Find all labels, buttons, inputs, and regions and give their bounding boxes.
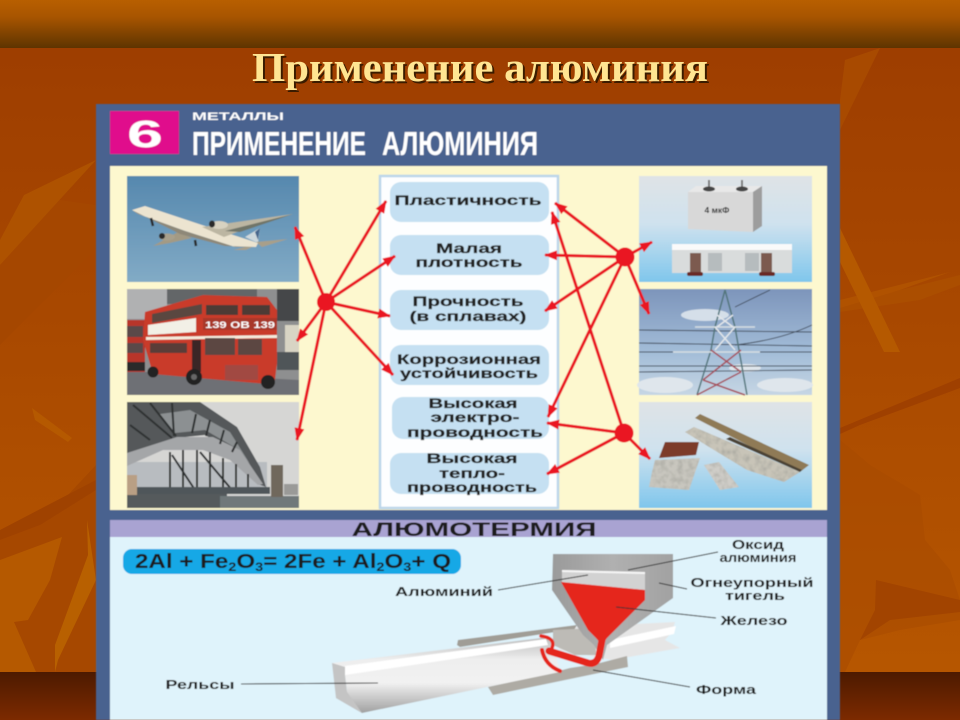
cream panel [110, 166, 827, 510]
reaction formula: O [385, 551, 403, 573]
property: plasticity [390, 182, 549, 222]
joint cavity [553, 628, 596, 655]
back mould [457, 625, 577, 647]
label: refractory crucible: тигель [725, 588, 785, 603]
aluminothermy heading bar [110, 520, 827, 541]
label: iron [616, 607, 788, 628]
label: rails: Рельсы [166, 677, 234, 692]
property: corrosion resistance: Коррозионная [397, 351, 541, 367]
panel: aluminothermy [110, 537, 827, 720]
panel: properties [380, 176, 558, 508]
label: aluminium oxide: Оксид [732, 537, 785, 552]
arrows: upper right hub [545, 203, 652, 417]
property: strength [390, 290, 549, 330]
section number badge [110, 111, 179, 156]
property: plasticity: Пластичность [394, 192, 542, 208]
label: aluminium: Алюминий [395, 584, 493, 599]
label: mould [593, 670, 757, 697]
near wing [202, 214, 293, 237]
label: iron: Железо [719, 613, 788, 628]
photo: capacitors: 4 мкФ [705, 205, 729, 215]
bottom band [0, 672, 960, 720]
arrows: lower right hub [547, 212, 650, 474]
photo: arch bridge [127, 402, 299, 508]
back rail [553, 622, 680, 660]
reaction formula: 2 [228, 560, 237, 574]
reaction formula: 2 [376, 560, 385, 574]
property: electrical conductivity: проводность [407, 424, 544, 440]
label: aluminium oxide: алюминия [720, 550, 796, 565]
poster [96, 104, 840, 720]
aluminothermy heading bar: АЛЮМОТЕРМИЯ [352, 520, 596, 541]
landing gear [151, 218, 196, 246]
property: electrical conductivity: электро- [430, 409, 520, 425]
diagram: rail welding [332, 554, 680, 713]
property: low density [390, 235, 549, 275]
fuselage [132, 206, 258, 247]
poster heading [192, 125, 538, 162]
property: low density: Малая [436, 240, 502, 256]
molten iron channel [541, 636, 602, 671]
poster heading: ПРИМЕНЕНИЕ [192, 125, 366, 162]
property: low density: плотность [416, 254, 523, 270]
photo: capacitors [639, 176, 812, 282]
reaction formula [123, 549, 461, 574]
label: mould: Форма [696, 682, 757, 697]
top lattice [127, 402, 266, 487]
property: electrical conductivity [392, 395, 549, 440]
reaction formula: = 2Fe + Al [263, 551, 376, 573]
crucible [552, 554, 673, 660]
stabilisers [256, 239, 288, 247]
reaction formula: 3 [403, 560, 412, 574]
far wing [153, 232, 192, 246]
reaction formula: 3 [255, 560, 264, 574]
title: Применение алюминия [254, 46, 710, 92]
arrows: left hub to properties and photos [295, 201, 395, 440]
label: aluminium oxide [628, 537, 796, 570]
reaction formula: 2Al + Fe [135, 551, 212, 573]
label: refractory crucible: Огнеупорный [690, 575, 814, 590]
property: corrosion resistance: устойчивость [400, 365, 539, 381]
engines [210, 221, 228, 229]
reaction formula: O [236, 551, 255, 573]
property: electrical conductivity: Высокая [428, 395, 518, 411]
property: strength: (в сплавах) [410, 308, 526, 324]
front rail [332, 637, 560, 713]
photo: aluminium foil [639, 402, 812, 508]
tail fin [245, 228, 260, 243]
property: corrosion resistance [390, 345, 549, 385]
property: strength: Прочность [412, 293, 524, 309]
poster frame [96, 104, 840, 720]
property: thermal conductivity: тепло- [439, 465, 505, 481]
photo: airplane [127, 176, 299, 282]
title: Применение алюминия [252, 44, 708, 90]
main bus body [143, 295, 277, 384]
property: thermal conductivity: проводность [407, 479, 538, 495]
poster heading: АЛЮМИНИЯ [382, 125, 538, 162]
photo: double-decker bus: 139 ОВ 139 [205, 320, 275, 330]
reaction formula: + Q [411, 551, 451, 573]
property: thermal conductivity: Высокая [426, 450, 518, 466]
photo: double-decker bus [127, 289, 299, 395]
tower [271, 465, 283, 497]
section number badge: 6 [127, 114, 163, 156]
front mould [488, 656, 628, 695]
poster category: МЕТАЛЛЫ [192, 111, 284, 123]
property: thermal conductivity [390, 450, 549, 495]
deck [127, 487, 270, 494]
photo: power line pylon [637, 289, 813, 395]
label: aluminium [395, 575, 588, 599]
label: refractory crucible [659, 575, 814, 603]
main chord [127, 437, 263, 485]
second bus [127, 320, 145, 372]
top band [0, 0, 960, 48]
